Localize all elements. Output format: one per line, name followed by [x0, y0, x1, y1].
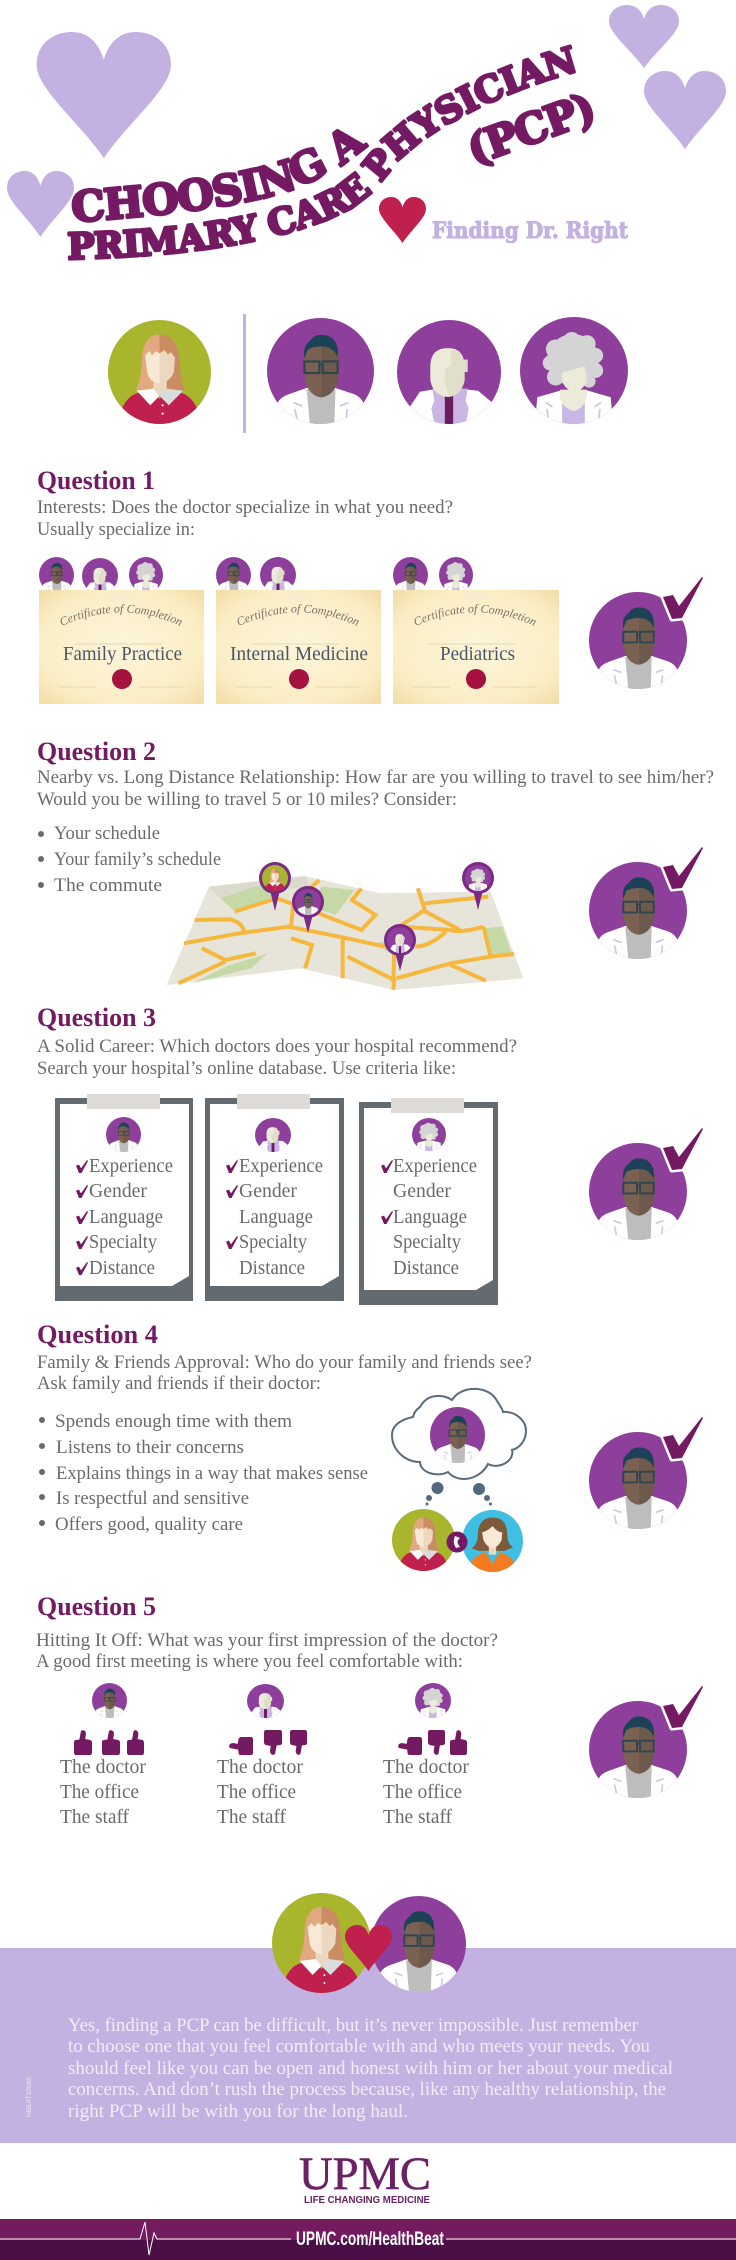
heading: question 4: Question 4: [37, 1320, 158, 1349]
text: question 4 intro: Ask family and friends if their doctor:: [37, 1374, 321, 1394]
review: doctor one: The office: [60, 1782, 139, 1803]
clipboard: doctor two: [205, 1094, 344, 1301]
review: doctor three: [383, 1683, 470, 1828]
thought cloud with doctor: [392, 1389, 526, 1506]
icon: heart between couple: [345, 1925, 392, 1971]
clipboard: doctor three: Experience: [393, 1156, 477, 1177]
icon: red heart: [379, 197, 426, 243]
review: doctor two: The staff: [217, 1807, 286, 1828]
review: doctor two: The office: [217, 1782, 296, 1803]
clipboard: doctor three: Distance: [393, 1258, 459, 1279]
text: conclusion: concerns. And don’t rush the process because, like any healthy relationship, the: [68, 2080, 666, 2100]
clipboard: doctor one: Gender: [89, 1181, 148, 1202]
pin: patient: [259, 862, 291, 911]
list: doctor qualities: Offers good, quality care: [55, 1515, 243, 1535]
heading: question 2: Question 2: [37, 737, 156, 766]
pin: doctor three: [462, 862, 494, 910]
review: doctor two: [217, 1684, 307, 1828]
clipboard: doctor three: [359, 1098, 498, 1305]
background heart right: [644, 71, 726, 149]
text: question 3 intro: Search your hospital’s online database. Use criteria like:: [37, 1059, 456, 1079]
text: question 5 intro: [36, 1631, 498, 1672]
clipboard: doctor three: Language: [393, 1207, 467, 1228]
panel: question 4: [37, 1320, 703, 1572]
certificate: internal medicine: Internal Medicine: [230, 643, 368, 665]
icon: doctor with checkmark: [589, 847, 703, 959]
footer bar: [0, 2219, 736, 2260]
certificate: pediatrics: Pediatrics: [440, 643, 515, 665]
icon: doctor three: [520, 317, 628, 424]
text: question 5 intro: A good first meeting is where you feel comfortable with:: [36, 1652, 463, 1672]
background heart left: [7, 171, 74, 237]
doctor avatars above certificates: [39, 557, 473, 594]
text: conclusion: should feel like you can be open and honest with him or her about your medical: [68, 2059, 673, 2079]
text: question 4 intro: [37, 1353, 532, 1394]
icon: woman on phone: [392, 1509, 455, 1571]
list: doctor qualities: Listens to their concerns: [56, 1438, 244, 1458]
icon: friend on phone: [462, 1510, 523, 1572]
certificate: pediatrics: [393, 590, 559, 704]
panel: conclusion band: [0, 1893, 736, 2143]
review: doctor one: The doctor: [60, 1757, 147, 1778]
job code: HBEAT10085: [27, 2076, 33, 2117]
icon: doctor two: [397, 320, 501, 424]
pin: doctor two: [384, 924, 416, 971]
panel: question 1: [37, 466, 703, 704]
icon: doctor with checkmark: [589, 1686, 703, 1798]
text: question 2 intro: Would you be willing to travel 5 or 10 miles? Consider:: [37, 790, 457, 810]
title: CHOOSING A: [72, 128, 370, 223]
title: (PCP): [470, 94, 594, 167]
clipboard: doctor three: Gender: [393, 1181, 452, 1202]
clipboard: doctor two: Experience: [239, 1156, 323, 1177]
icon: doctor with checkmark: [589, 1417, 703, 1529]
review: doctor one: [60, 1683, 147, 1828]
icon: doctor in couple: [371, 1896, 466, 1992]
list: doctor qualities: Spends enough time with them: [55, 1412, 293, 1432]
panel: question 5: [36, 1592, 703, 1828]
clipboard: doctor two: Distance: [239, 1258, 305, 1279]
clipboard: doctor two: Specialty: [239, 1232, 307, 1253]
clipboard: doctor two: Language: [239, 1207, 313, 1228]
review: doctor three: The staff: [383, 1807, 452, 1828]
map with pins: [167, 862, 523, 990]
certificate: internal medicine: Certificate of Completion: [238, 604, 359, 626]
certificate: internal medicine: [216, 590, 381, 704]
list: considerations: The commute: [54, 876, 162, 896]
review: doctor three: The doctor: [383, 1757, 470, 1778]
text: question 4 intro: Family & Friends Approval: Who do your family and friends see?: [37, 1353, 532, 1373]
certificate: family practice: [39, 590, 204, 704]
icon: patient avatar: [108, 320, 211, 424]
list: doctor qualities: Is respectful and sensitive: [56, 1489, 249, 1509]
background heart large: [37, 32, 171, 158]
footer bar: UPMC.com/HealthBeat: [296, 2229, 444, 2250]
text: conclusion: [68, 2016, 673, 2122]
list: doctor qualities: Explains things in a way that makes sense: [56, 1464, 368, 1484]
icon: doctor with checkmark: [589, 1128, 703, 1240]
list: considerations: [38, 824, 221, 896]
list: considerations: Your schedule: [54, 824, 160, 844]
clipboard: doctor one: [55, 1094, 193, 1301]
text: conclusion: to choose one that you feel comfortable with and who meets your needs. You: [68, 2037, 650, 2057]
list: doctor qualities: [39, 1412, 368, 1535]
text: conclusion: right PCP will be with you for the long haul.: [68, 2102, 408, 2122]
icon: doctor one: [267, 318, 374, 424]
clipboard: doctor one: Specialty: [89, 1232, 157, 1253]
panel: question 2: [37, 737, 714, 990]
text: question 1 intro: Interests: Does the doctor specialize in what you need?: [37, 498, 453, 518]
heading: question 1: Question 1: [37, 466, 155, 495]
logo: UPMC: UPMC: [299, 2148, 431, 2200]
text: question 1 intro: Usually specialize in:: [37, 520, 195, 540]
review: doctor three: The office: [383, 1782, 462, 1803]
certificate: family practice: Family Practice: [63, 643, 182, 665]
certificate: family practice: Certificate of Completion: [60, 604, 182, 626]
certificate: pediatrics: Certificate of Completion: [414, 604, 536, 626]
text: question 3 intro: A Solid Career: Which doctors does your hospital recommend?: [37, 1037, 517, 1057]
text: question 5 intro: Hitting It Off: What was your first impression of the doctor?: [36, 1631, 498, 1651]
clipboard: doctor three: Specialty: [393, 1232, 461, 1253]
panel: question 3: [37, 1003, 703, 1305]
review: doctor two: The doctor: [217, 1757, 304, 1778]
list: considerations: Your family’s schedule: [54, 850, 221, 870]
clipboard: doctor one: Language: [89, 1207, 163, 1228]
icon: doctor with checkmark: [589, 577, 703, 689]
text: question 2 intro: [37, 768, 714, 810]
icon: woman in couple: [272, 1893, 371, 1993]
clipboard: doctor two: Gender: [239, 1181, 298, 1202]
background heart top right: [609, 5, 679, 68]
heading: question 3: Question 3: [37, 1003, 156, 1032]
pin: doctor one: [292, 886, 324, 933]
text: question 1 intro: [37, 498, 453, 540]
subtitle: Finding Dr. Right: [432, 218, 629, 244]
text: question 3 intro: [37, 1037, 517, 1079]
clipboard: doctor one: Distance: [89, 1258, 155, 1279]
text: conclusion: Yes, finding a PCP can be difficult, but it’s never impossible. Just remember: [68, 2016, 638, 2036]
title: PRIMARY CARE PHYSICIAN: [67, 44, 576, 261]
text: question 2 intro: Nearby vs. Long Distance Relationship: How far are you willing to travel to see him/her?: [37, 768, 714, 788]
logo: UPMC: LIFE CHANGING MEDICINE: [304, 2195, 430, 2206]
divider: [243, 314, 246, 433]
review: doctor one: The staff: [60, 1807, 129, 1828]
icon: phone: [446, 1532, 468, 1552]
heading: question 5: Question 5: [37, 1592, 156, 1621]
clipboard: doctor one: Experience: [89, 1156, 173, 1177]
